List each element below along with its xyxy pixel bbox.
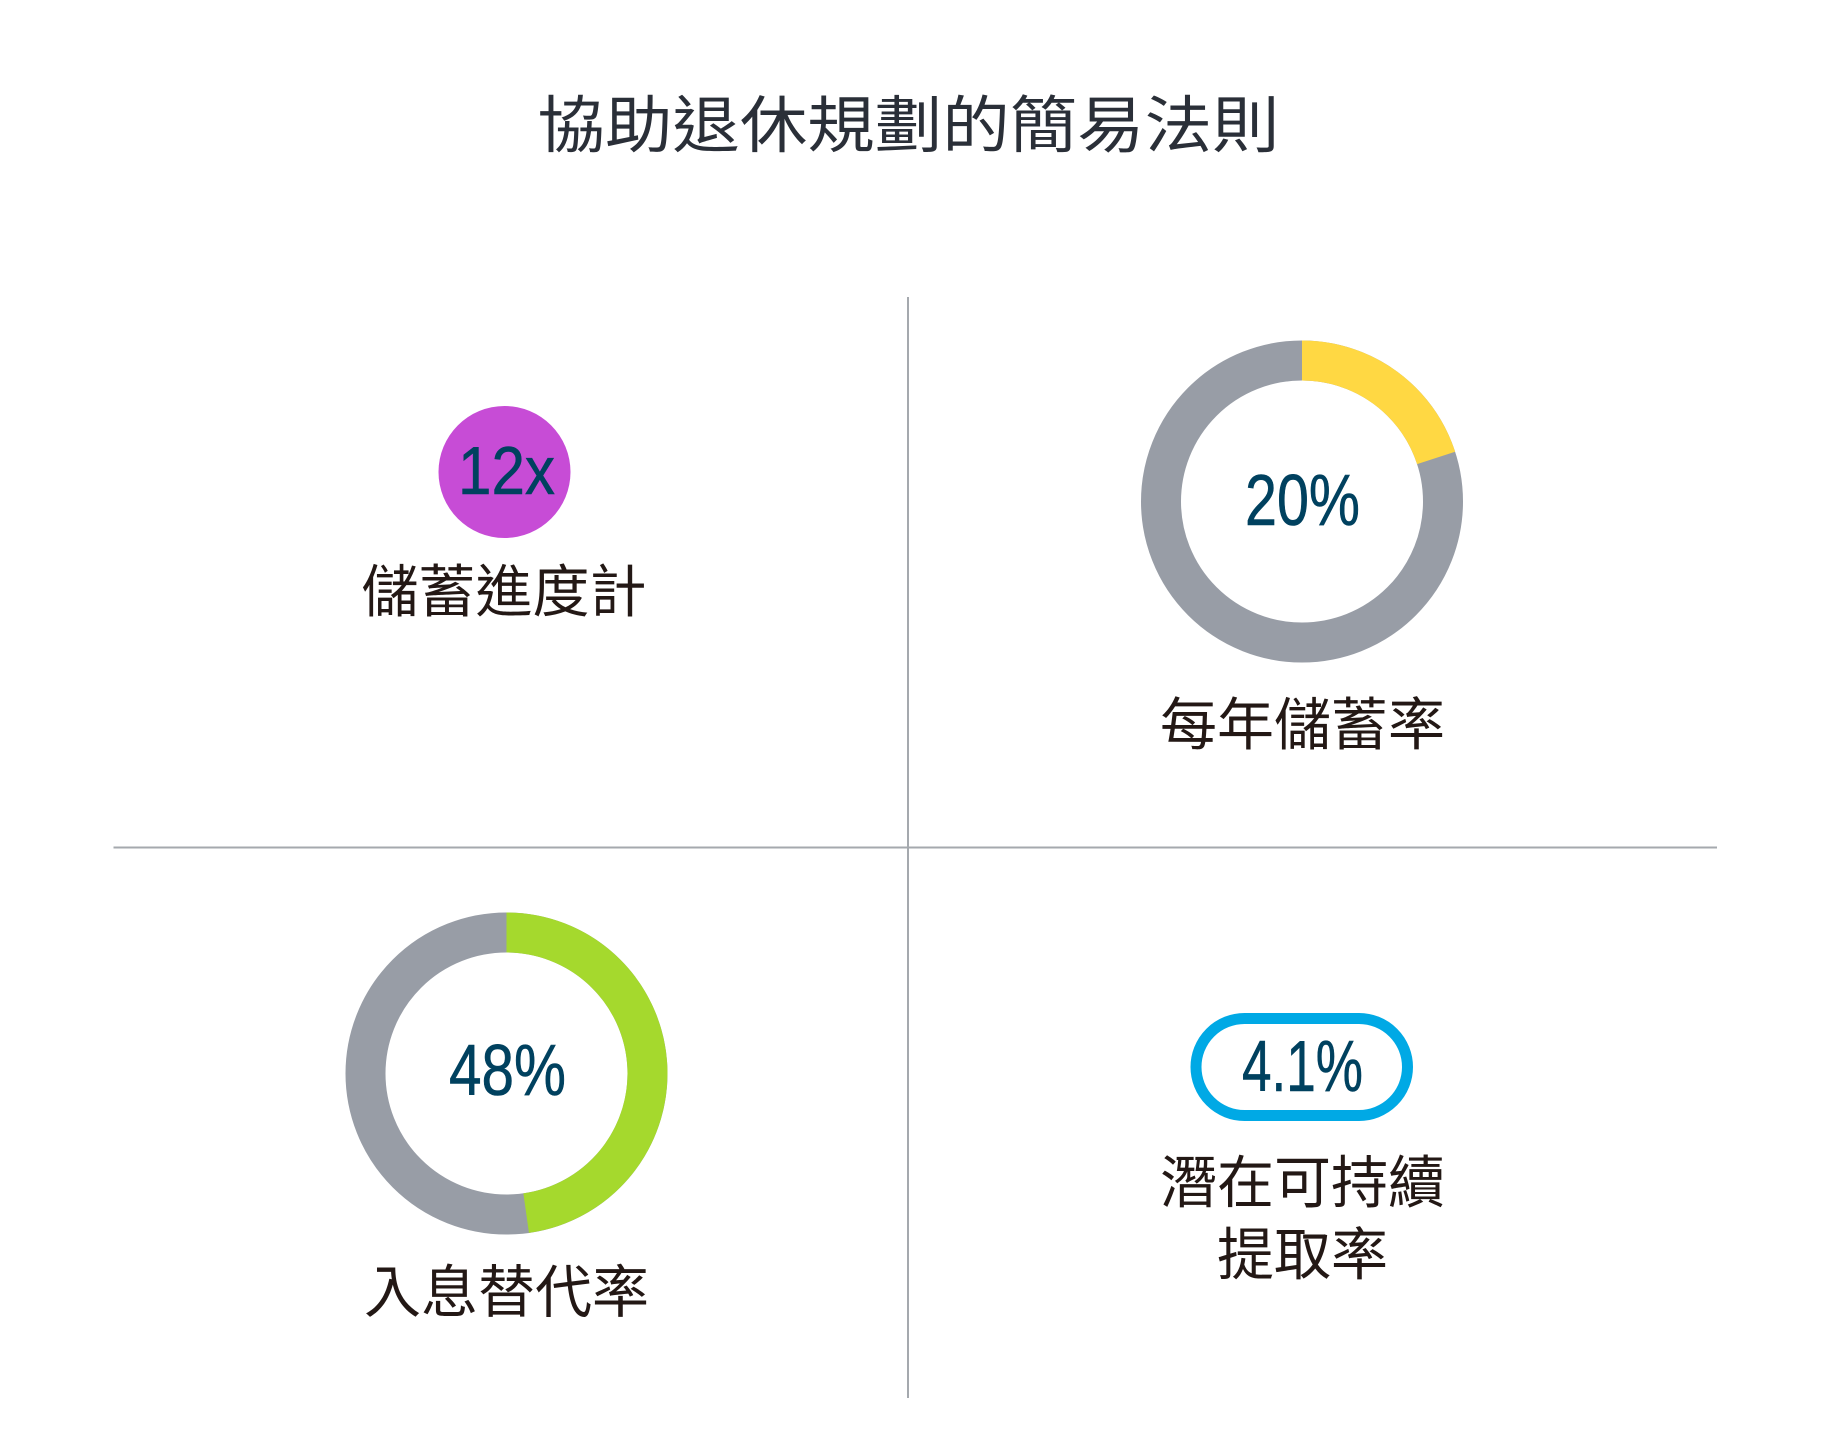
panel: savings progress <box>362 406 646 624</box>
icon: blue pill with 4.1%: 4.1% <box>1242 1027 1363 1107</box>
label: annual savings rate: 每年儲蓄率 <box>1160 694 1445 758</box>
icon: purple circle with 12x: 12x <box>458 433 555 509</box>
label: sustainable withdrawal rate <box>1160 1152 1445 1288</box>
label: savings progress: 儲蓄進度計 <box>362 560 646 624</box>
donut chart: 48% <box>366 932 648 1214</box>
label: income replacement rate: 入息替代率 <box>364 1261 649 1325</box>
icon: purple circle with 12x <box>438 406 570 538</box>
donut chart: 20% <box>1161 360 1443 642</box>
label: sustainable withdrawal rate: 潛在可持續 <box>1160 1152 1445 1216</box>
donut chart: 48%: 48% <box>449 1031 566 1111</box>
panel: income replacement rate <box>364 932 649 1325</box>
donut chart: 20%: 20% <box>1245 461 1360 541</box>
title: 協助退休規劃的簡易法則 <box>538 92 1280 161</box>
label: sustainable withdrawal rate: 提取率 <box>1217 1224 1388 1288</box>
panel: sustainable withdrawal rate <box>1160 1018 1445 1288</box>
panel: annual savings rate <box>1160 360 1445 758</box>
icon: blue pill with 4.1% <box>1196 1018 1408 1116</box>
